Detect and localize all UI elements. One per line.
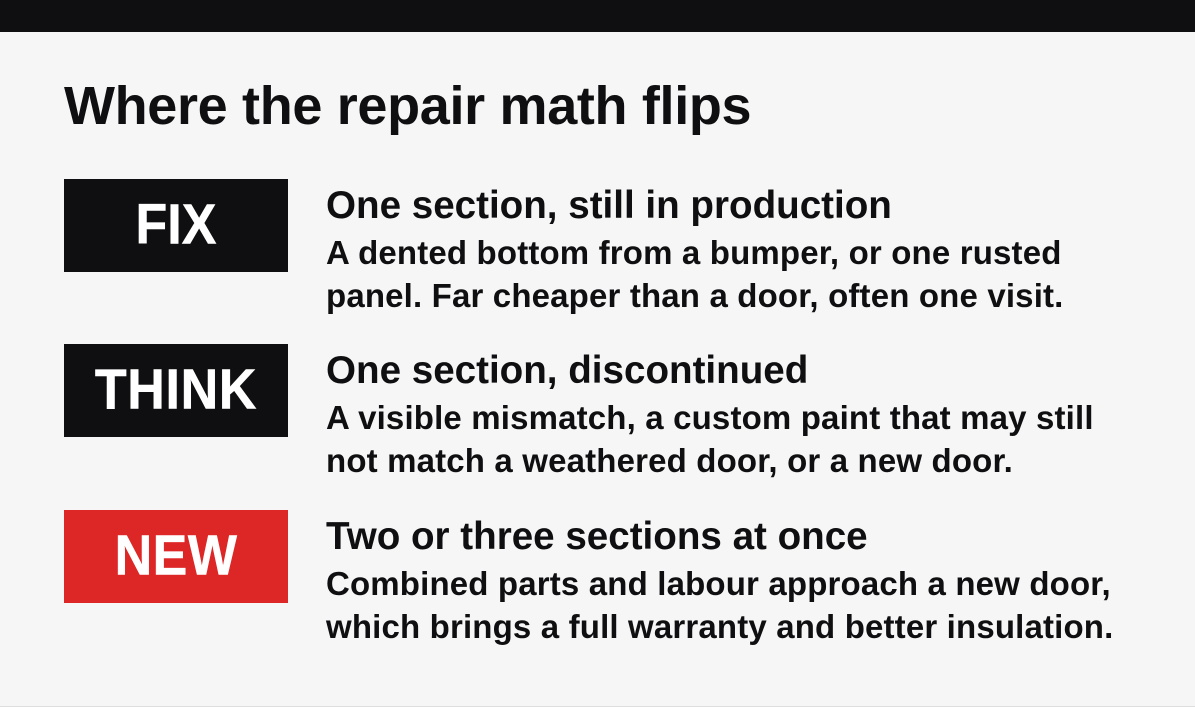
heading: new: Two or three sections at once <box>326 515 868 558</box>
text: think line 1: A visible mismatch, a custom paint that may still <box>326 399 1094 436</box>
badge: NEW: NEW <box>115 525 237 588</box>
panel: new row <box>64 510 1113 645</box>
badge: FIX <box>64 179 288 272</box>
text: fix line 1: A dented bottom from a bumper, or one rusted <box>326 234 1062 271</box>
bottom edge line <box>0 706 1195 707</box>
panel: think row <box>64 344 1094 479</box>
text: think line 2: not match a weathered door, or a new door. <box>326 442 1013 479</box>
badge: FIX: FIX <box>136 194 216 257</box>
badge: THINK <box>64 344 288 437</box>
heading: fix: One section, still in production <box>326 184 892 227</box>
top bar <box>0 0 1195 32</box>
panel: fix row <box>64 179 1064 314</box>
badge: THINK: THINK <box>95 359 257 422</box>
heading: think: One section, discontinued <box>326 349 808 392</box>
text: fix line 2: panel. Far cheaper than a door, often one visit. <box>326 277 1064 314</box>
badge: NEW <box>64 510 288 603</box>
title: Where the repair math flips <box>64 76 751 136</box>
text: new line 2: which brings a full warranty and better insulation. <box>326 608 1113 645</box>
text: new line 1: Combined parts and labour approach a new door, <box>326 565 1111 602</box>
